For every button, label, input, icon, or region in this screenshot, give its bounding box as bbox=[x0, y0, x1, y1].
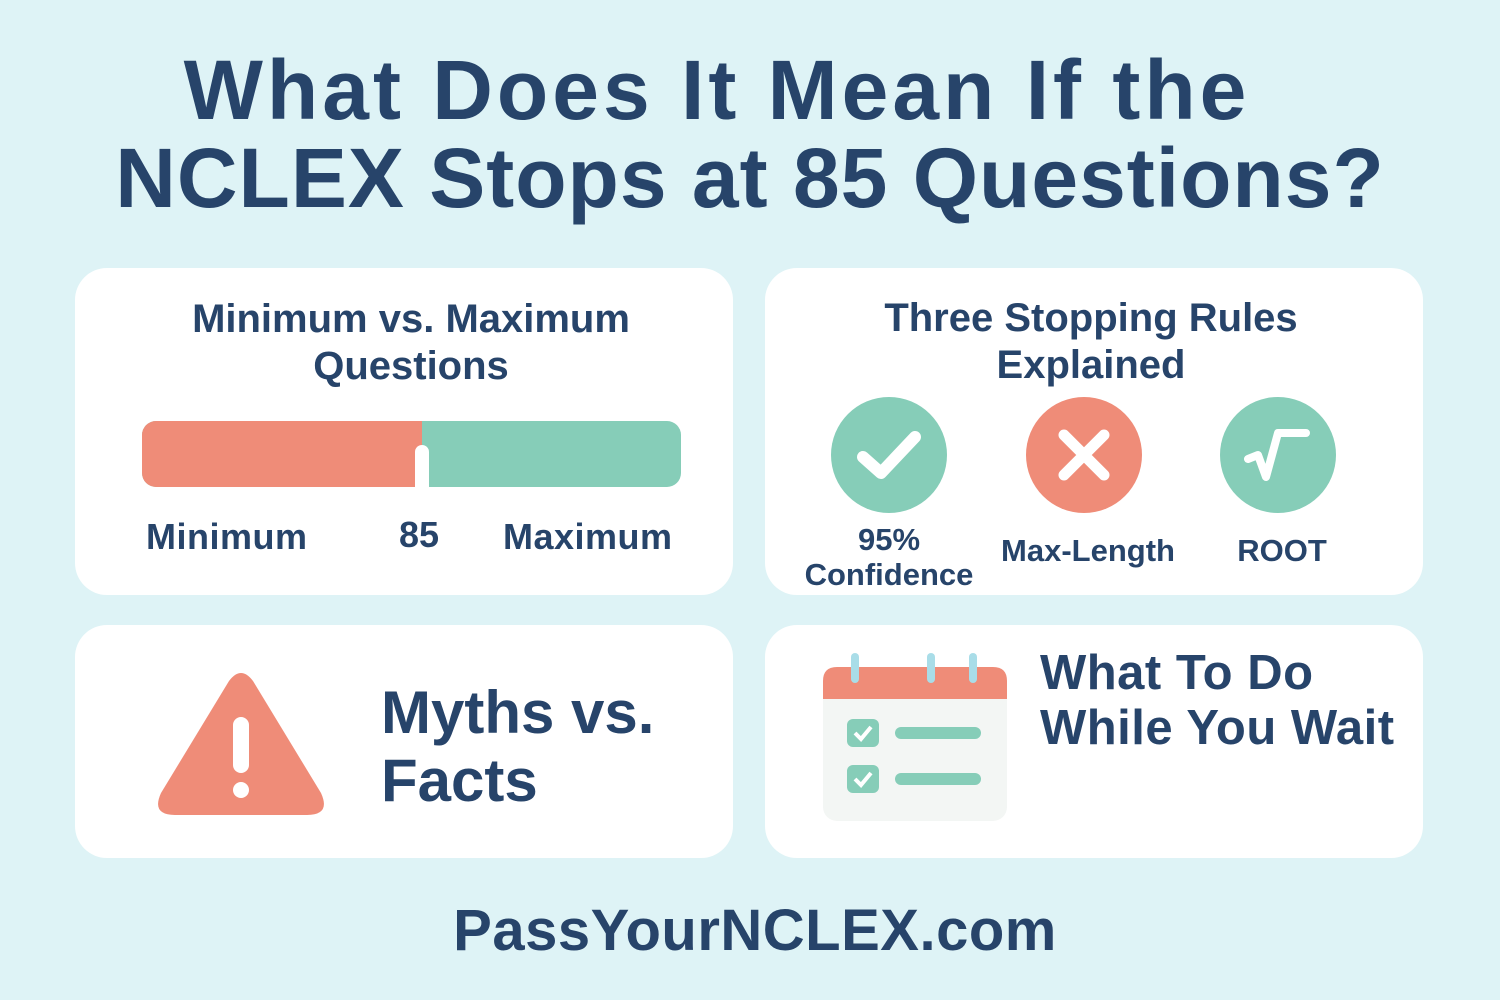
rule labels: Max-Length bbox=[1001, 533, 1175, 568]
footer: PassYourNCLEX.com bbox=[453, 898, 1057, 963]
heading: Three Stopping Rules bbox=[884, 296, 1298, 340]
icon: root bbox=[1220, 397, 1336, 513]
icon: calendar bbox=[823, 653, 1007, 821]
heading bbox=[192, 297, 630, 388]
icon: x bbox=[1026, 397, 1142, 513]
heading bbox=[1040, 646, 1395, 755]
bar labels: 85 bbox=[399, 514, 439, 555]
bar chart bbox=[142, 421, 681, 487]
heading bbox=[884, 296, 1298, 387]
rule labels: 95% bbox=[858, 522, 920, 557]
title: NCLEX Stops at 85 Questions? bbox=[115, 131, 1385, 225]
panel: what to do bbox=[765, 625, 1423, 858]
heading: Facts bbox=[381, 747, 538, 814]
title: What Does It Mean If the bbox=[184, 43, 1250, 137]
heading: What To Do bbox=[1040, 646, 1314, 700]
panel: minimum vs maximum bbox=[75, 268, 733, 595]
heading: Questions bbox=[313, 344, 509, 388]
panel: three stopping rules bbox=[765, 268, 1423, 595]
bar labels: Maximum bbox=[503, 516, 673, 557]
panel: myths vs facts bbox=[75, 625, 733, 858]
rule labels: ROOT bbox=[1237, 533, 1327, 568]
bar labels: Minimum bbox=[146, 516, 308, 557]
heading: Minimum vs. Maximum bbox=[192, 297, 630, 341]
heading: Explained bbox=[997, 343, 1185, 387]
bar labels bbox=[146, 514, 673, 557]
rule labels bbox=[805, 522, 1327, 592]
title bbox=[115, 43, 1385, 225]
icon: check bbox=[831, 397, 947, 513]
heading bbox=[381, 679, 654, 814]
rule labels: Confidence bbox=[805, 557, 973, 592]
heading: While You Wait bbox=[1040, 701, 1395, 755]
icon: warning bbox=[158, 673, 324, 815]
heading: Myths vs. bbox=[381, 679, 654, 746]
